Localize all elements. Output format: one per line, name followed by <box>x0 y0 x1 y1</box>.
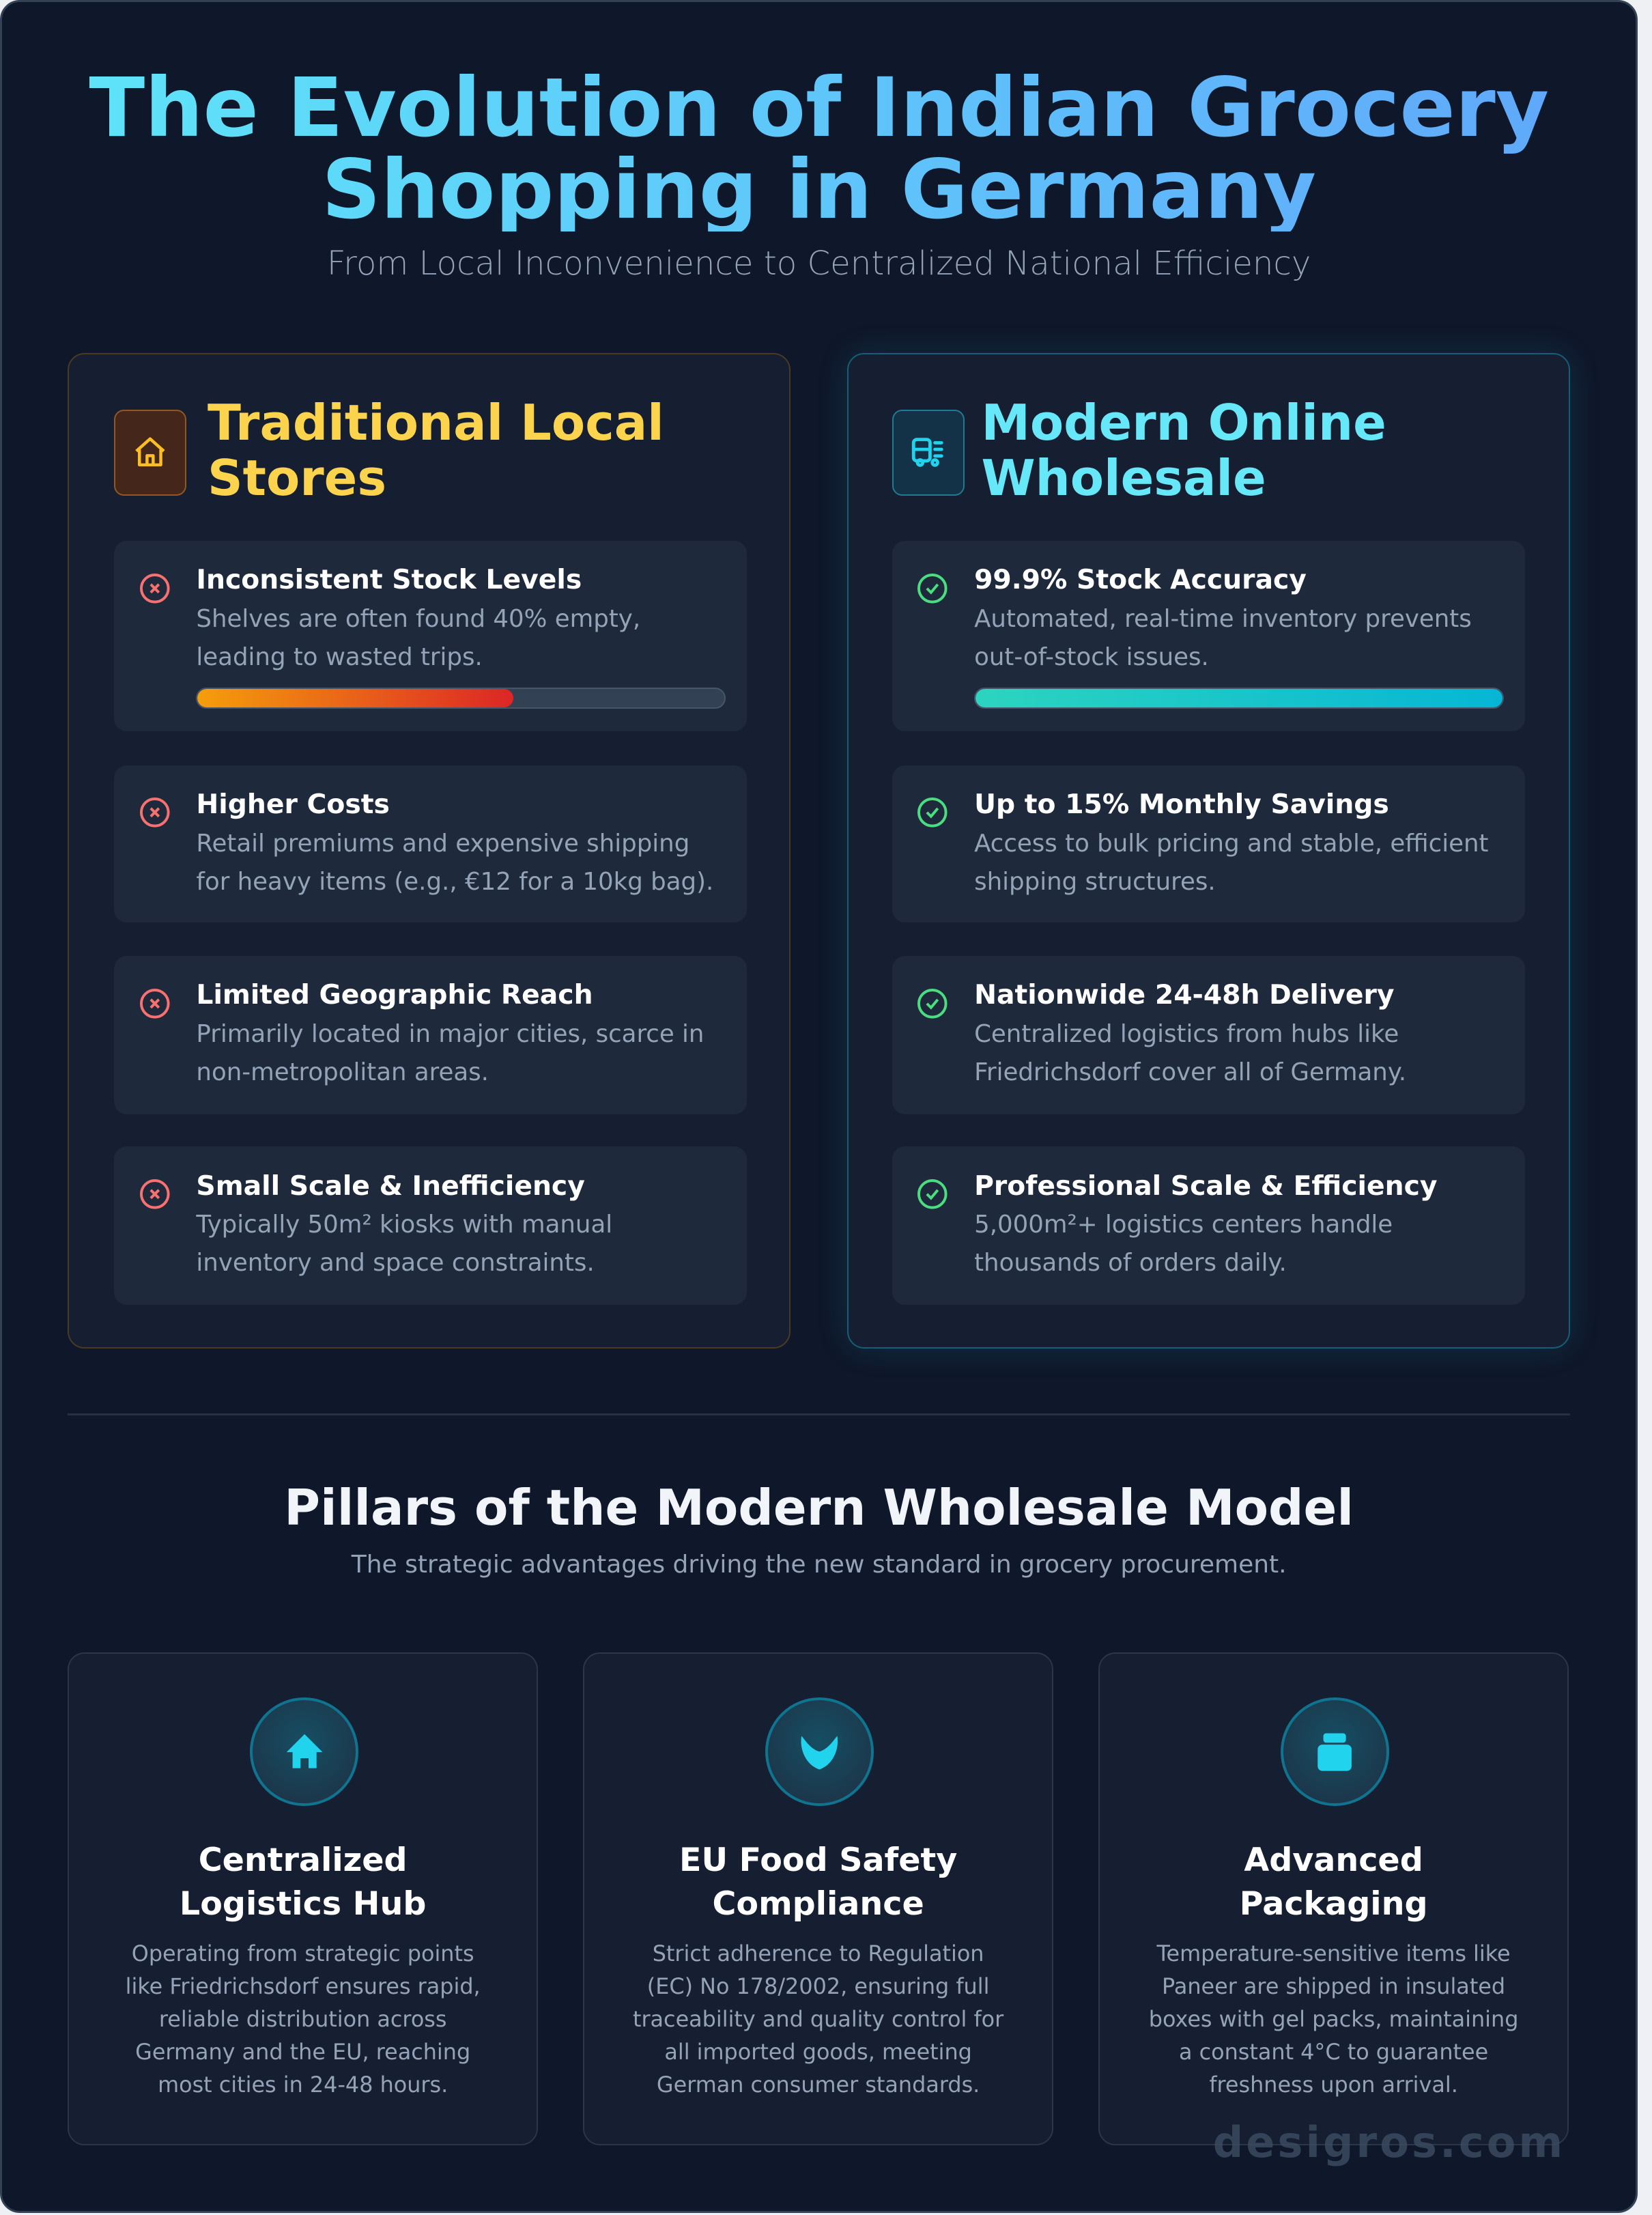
card: food safety: all imported goods, meeting <box>664 2039 972 2065</box>
item: small scale: Typically 50m² kiosks with manual inventory and space constraints. <box>196 1211 612 1277</box>
item: limited reach <box>114 956 747 1114</box>
item: savings: Up to 15% Monthly Savings <box>974 789 1389 820</box>
card: food safety: (EC) No 178/2002, ensuring full <box>647 1973 989 1999</box>
item: small scale <box>114 1146 747 1305</box>
card: logistics hub <box>68 1652 538 2145</box>
heading: modern: Modern Online <box>981 394 1386 451</box>
item: professional scale <box>892 1146 1525 1305</box>
title <box>0 68 1638 231</box>
card: packaging <box>1098 1652 1569 2145</box>
heading: traditional: Stores <box>208 449 386 507</box>
icon: house <box>114 410 186 496</box>
item: limited reach: Limited Geographic Reach <box>196 980 593 1011</box>
card: logistics hub: Operating from strategic points like Friedrichsdorf ensures rapid, reliable distribution across Germany and the EU, reaching most cities in 24-48 hours. <box>126 1941 481 2098</box>
item: delivery <box>892 956 1525 1114</box>
icon: box <box>1281 1697 1389 1806</box>
title: The Evolution of Indian Grocery <box>89 61 1549 156</box>
card: packaging: Advanced <box>1244 1842 1423 1879</box>
panel: traditional local stores <box>68 353 791 1349</box>
card: food safety: German consumer standards. <box>657 2072 980 2098</box>
item: inconsistent stock: Inconsistent Stock Levels <box>196 565 582 595</box>
icon: truck <box>892 410 965 496</box>
item: stock accuracy: Automated, real-time inventory prevents out-of-stock issues. <box>974 605 1472 671</box>
item: delivery: Nationwide 24-48h Delivery <box>974 980 1395 1011</box>
card: packaging: Temperature-sensitive items like Paneer are shipped in insulated boxes with gel packs, maintaining a constant 4°C to guarantee freshness upon arrival. <box>1149 1941 1518 2098</box>
item: higher costs: Retail premiums and expensive shipping <box>196 830 689 858</box>
subtitle: From Local Inconvenience to Centralized National Efficiency <box>327 244 1311 283</box>
heading: modern: Wholesale <box>981 449 1266 507</box>
item: stock accuracy <box>892 541 1525 731</box>
card: logistics hub: Logistics Hub <box>180 1885 426 1923</box>
item: higher costs: Higher Costs <box>196 789 390 820</box>
heading: traditional <box>208 394 664 507</box>
icon: shield <box>765 1697 874 1806</box>
item: professional scale: Professional Scale & Efficiency <box>974 1171 1437 1202</box>
item: higher costs <box>114 765 747 922</box>
subheading: The strategic advantages driving the new standard in grocery procurement. <box>352 1551 1287 1579</box>
item: limited reach: Primarily located in major cities, scarce in non-metropolitan areas. <box>196 1020 704 1086</box>
item: small scale: Small Scale & Inefficiency <box>196 1171 585 1202</box>
watermark: desigros.com <box>1213 2117 1565 2167</box>
item: delivery: Centralized logistics from hubs like Friedrichsdorf cover all of Germany. <box>974 1020 1406 1086</box>
item: savings: Access to bulk pricing and stable, efficient shipping structures. <box>974 830 1488 896</box>
title: Shopping in Germany <box>322 143 1316 238</box>
panel: modern online wholesale <box>847 353 1570 1349</box>
item: higher costs: for heavy items (e.g., €12 for a 10kg bag). <box>196 868 713 896</box>
card: food safety: EU Food Safety <box>679 1842 957 1879</box>
item: inconsistent stock <box>114 541 747 731</box>
card: food safety: Strict adherence to Regulation <box>653 1941 984 1966</box>
card: food safety <box>583 1652 1053 2145</box>
icon: home <box>250 1697 358 1806</box>
bar: 60% <box>196 688 726 709</box>
item: inconsistent stock: Shelves are often found 40% empty, leading to wasted trips. <box>196 605 640 671</box>
heading: pillars: Pillars of the Modern Wholesale Model <box>284 1479 1354 1536</box>
item: professional scale: 5,000m²+ logistics centers handle thousands of orders daily. <box>974 1211 1393 1277</box>
card: packaging: Packaging <box>1240 1885 1428 1923</box>
card: logistics hub: Centralized <box>199 1842 408 1879</box>
card: food safety: Compliance <box>713 1885 924 1923</box>
heading: traditional: Traditional Local <box>208 394 664 451</box>
heading: modern <box>981 394 1386 507</box>
card: food safety: traceability and quality control for <box>633 2006 1003 2032</box>
item: savings <box>892 765 1525 922</box>
item: stock accuracy: 99.9% Stock Accuracy <box>974 565 1307 595</box>
bar: full <box>974 688 1504 709</box>
